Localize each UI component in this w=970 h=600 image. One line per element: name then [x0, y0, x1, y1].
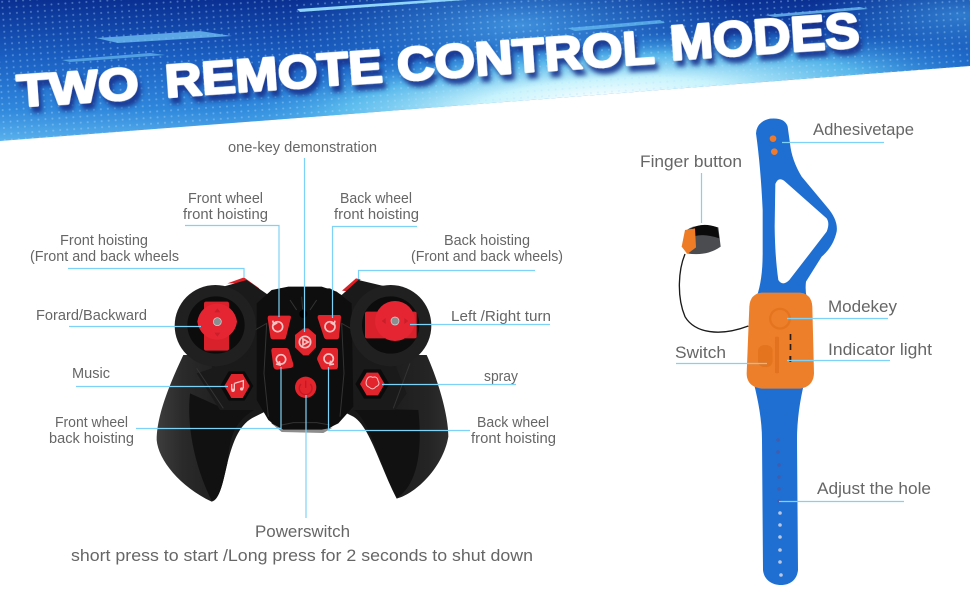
label: back hoisting: (Front and back wheels)	[411, 248, 563, 265]
button: music	[220, 371, 253, 401]
switch	[758, 345, 773, 367]
centre body	[257, 287, 353, 431]
button: back wheel front hoisting lower	[317, 348, 338, 370]
wire	[679, 254, 748, 332]
label: back wheel front hoisting: front hoisting	[334, 206, 419, 223]
adhesive studs	[770, 135, 778, 155]
indicator slits	[789, 334, 791, 362]
label: front wheel front hoisting	[183, 190, 279, 317]
label: adhesive tape	[782, 120, 914, 142]
title: MODES	[668, 4, 861, 71]
label: back wheel front hoisting	[332, 190, 419, 318]
strap upper loop	[756, 118, 837, 297]
button: front wheel back hoisting	[271, 348, 293, 370]
label: front wheel front hoisting: Front wheel	[188, 190, 263, 207]
label: front hoisting: Front hoisting	[60, 232, 148, 249]
label: front wheel back hoisting: Front wheel	[55, 414, 128, 431]
finger ring	[682, 225, 721, 254]
upper body	[197, 280, 407, 410]
button: back wheel front hoisting	[318, 315, 341, 339]
label: back hoisting	[358, 232, 563, 279]
label: music: Music	[72, 365, 110, 382]
label: spray	[382, 368, 518, 385]
label: front hoisting: (Front and back wheels	[30, 248, 179, 265]
control module	[747, 293, 814, 389]
label: power switch: Powerswitch	[255, 522, 350, 541]
left joystick	[175, 285, 256, 366]
label: indicator light: Indicator light	[828, 340, 932, 359]
button: front wheel front hoisting	[268, 316, 291, 339]
label: front wheel front hoisting: front hoisting	[183, 206, 268, 223]
right joystick	[350, 285, 431, 366]
label: switch: Switch	[675, 343, 726, 362]
label: spray: spray	[484, 368, 518, 385]
label: finger button	[640, 152, 742, 223]
label: adhesive tape: Adhesivetape	[813, 120, 914, 139]
label: left right turn: Left /Right turn	[451, 308, 551, 325]
mode key	[769, 308, 791, 330]
label: front wheel back hoisting	[49, 367, 281, 447]
wristband	[679, 118, 837, 585]
label: back wheel front hoisting lower	[328, 367, 556, 447]
label: finger button: Finger button	[640, 152, 742, 171]
label: back hoisting: Back hoisting	[444, 232, 530, 249]
banner background	[0, 0, 970, 145]
grip inner panels	[189, 393, 420, 501]
label: forward backward: Forard/Backward	[36, 307, 147, 324]
gamepad controller	[157, 277, 448, 502]
title	[15, 4, 861, 117]
label: back wheel front hoisting lower: Back wheel	[477, 414, 549, 431]
red shoulder buttons	[227, 277, 361, 292]
label: front hoisting	[30, 232, 244, 278]
button: spray	[355, 369, 389, 399]
title: TWO	[15, 58, 140, 117]
strap lower	[754, 384, 804, 585]
label: front wheel back hoisting: back hoisting	[49, 430, 134, 447]
title: REMOTE	[163, 40, 384, 107]
label: back wheel front hoisting: Back wheel	[340, 190, 412, 207]
label: mode key	[787, 297, 897, 318]
grips	[157, 355, 448, 502]
button: one-key demonstration	[295, 328, 316, 355]
label: adjust the hole: Adjust the hole	[817, 479, 931, 498]
label: power switch: short press to start /Long press for 2 seconds to shut down	[71, 546, 533, 565]
label: power switch	[71, 395, 533, 565]
label: one-key demonstration: one-key demonstration	[228, 139, 377, 156]
label: switch	[675, 343, 767, 364]
strap holes	[776, 438, 783, 577]
label: mode key: Modekey	[828, 297, 897, 316]
label: back wheel front hoisting lower: front hoisting	[471, 430, 556, 447]
button: power	[295, 377, 316, 398]
title: CONTROL	[395, 20, 656, 91]
